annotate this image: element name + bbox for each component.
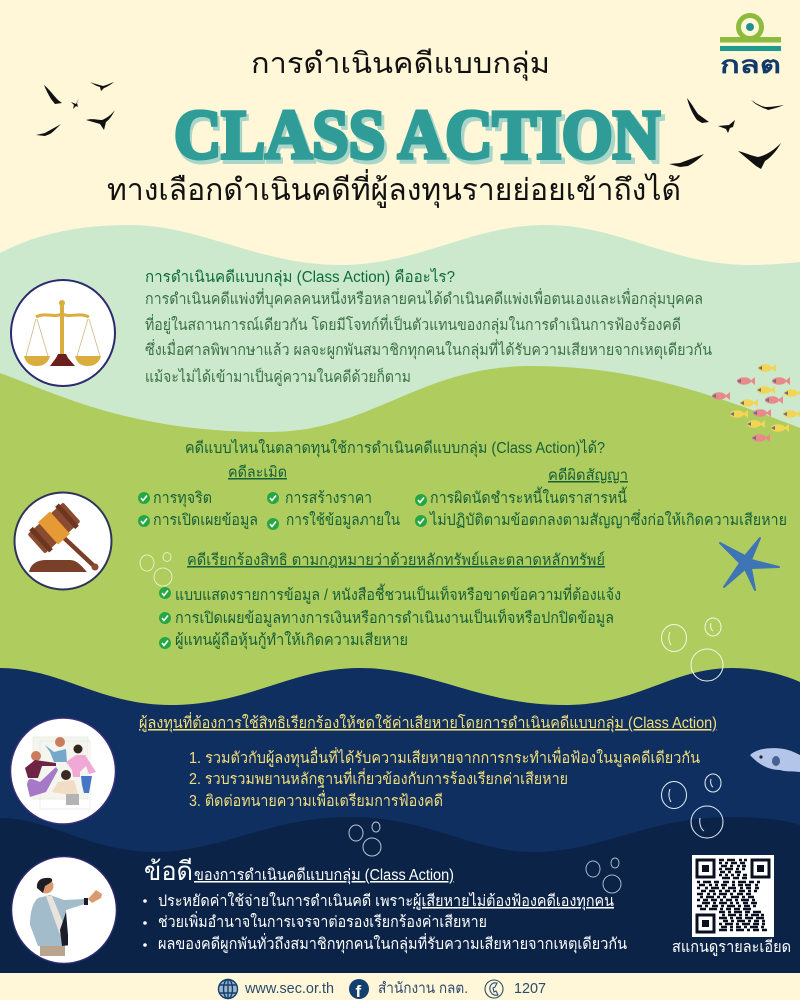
- heading: tort: คดีละเมิด: [228, 464, 287, 481]
- heading: breach of contract: คดีผิดสัญญา: [548, 467, 628, 484]
- panel: steps for investors: [10, 712, 717, 824]
- birds: right flock: [669, 98, 784, 169]
- text: definition: [145, 288, 712, 387]
- decoration: bubbles: [140, 552, 723, 893]
- icon: gavel: [14, 492, 112, 590]
- title: thai heading: การดำเนินคดีแบบกลุ่ม: [251, 48, 550, 81]
- heading: advantages: [144, 856, 454, 886]
- checklist: case types: การผิดนัดชำระหนี้ในตราสารหนี้: [430, 486, 627, 507]
- icon: starfish: [720, 538, 779, 590]
- text: website: www.sec.or.th: [244, 980, 334, 997]
- checklist: case types: การทุจริต: [153, 490, 212, 508]
- title: CLASS ACTION: CLASS ACTION: [174, 97, 660, 174]
- list: numbered steps: [189, 747, 700, 810]
- list: numbered steps: 2. รวบรวมพยานหลักฐานที่เกี่ยวข้องกับการร้องเรียกค่าเสียหาย: [189, 768, 568, 788]
- checklist: case types: [138, 486, 787, 530]
- text: hotline: 1207: [514, 980, 546, 997]
- QR code: [692, 855, 774, 937]
- heading: investor steps: ผู้ลงทุนที่ต้องการใช้สิทธิเรียกร้องให้ชดใช้ค่าเสียหายโดยการดำเนินคดีแบบกลุ่ม (Class Action): [139, 712, 717, 733]
- text: definition: แม้จะไม่ได้เข้ามาเป็นคู่ความในคดีด้วยก็ตาม: [145, 367, 411, 387]
- text: QR caption: สแกนดูรายละเอียด: [672, 939, 791, 957]
- icon: presenter: [12, 856, 116, 964]
- logo: SEC: [720, 16, 781, 79]
- icon: phone: [485, 980, 503, 998]
- checklist: securities claims: การเปิดเผยข้อมูลทางการเงินหรือการดำเนินงานเป็นเท็จหรือปกปิดข้อมูล: [175, 608, 614, 628]
- title: CLASS ACTION: CLASS ACTION: [176, 101, 664, 178]
- list: numbered steps: 3. ติดต่อทนายความเพื่อเตรียมการฟ้องคดี: [189, 790, 443, 810]
- checklist: case types: การใช้ข้อมูลภายใน: [286, 511, 400, 530]
- icon: blue fish: [750, 748, 800, 772]
- heading: what is it: การดำเนินคดีแบบกลุ่ม (Class Action) คืออะไร?: [145, 268, 455, 287]
- icon: globe: [218, 980, 238, 998]
- checklist: case types: การเปิดเผยข้อมูล: [153, 512, 258, 530]
- list: benefits: ผลของคดีผูกพันทั่วถึงสมาชิกทุกคนในกลุ่มที่รับความเสียหายจากเหตุเดียวกัน: [158, 933, 627, 954]
- footer: [218, 979, 546, 1000]
- heading: which cases: คดีแบบไหนในตลาดทุนใช้การดำเนินคดีแบบกลุ่ม (Class Action)ได้?: [185, 439, 605, 458]
- text: definition: การดำเนินคดีแพ่งที่บุคคลคนหนึ่งหรือหลายคนได้ดำเนินคดีแพ่งเพื่อตนเองและเพื่อกลุ่มบุคคล: [145, 288, 703, 309]
- subtitle: ทางเลือกดำเนินคดีที่ผู้ลงทุนรายย่อยเข้าถึงได้: [107, 169, 681, 209]
- text: facebook page: สำนักงาน กลต.: [378, 980, 468, 997]
- checklist: case types: การสร้างราคา: [285, 490, 372, 507]
- list: benefits: ช่วยเพิ่มอำนาจในการเจรจาต่อรองเรียกร้องค่าเสียหาย: [158, 911, 487, 931]
- decoration: school of fish: [712, 364, 800, 442]
- heading: securities law claims: คดีเรียกร้องสิทธิ ตามกฎหมายว่าด้วยหลักทรัพย์และตลาดหลักทรัพย์: [187, 551, 605, 569]
- list: benefits: ประหยัดค่าใช้จ่ายในการดำเนินคดี เพราะผู้เสียหายไม่ต้องฟ้องคดีเองทุกคน: [158, 892, 614, 911]
- checklist: securities claims: แบบแสดงรายการข้อมูล / หนังสือชี้ชวนเป็นเท็จหรือขาดข้อความที่ต้องแจ้ง: [175, 583, 621, 605]
- heading: advantages: ข้อดี: [144, 856, 193, 886]
- logo: SEC: กลต: [720, 52, 781, 79]
- list: benefits: [143, 892, 627, 954]
- text: definition: ที่อยู่ในสถานการณ์เดียวกัน โดยมีโจทก์ที่เป็นตัวแทนของกลุ่มในการดำเนินการฟ้องร้องคดี: [145, 314, 681, 335]
- icon: group of people: [10, 718, 116, 824]
- checklist: securities claims: ผู้แทนผู้ถือหุ้นกู้ทำให้เกิดความเสียหาย: [175, 631, 408, 650]
- checklist: securities claims: [159, 583, 621, 650]
- birds: left flock: [36, 82, 115, 136]
- text: definition: ซึ่งเมื่อศาลพิพากษาแล้ว ผลจะผูกพันสมาชิกทุกคนในกลุ่มที่ได้รับความเสียหายจากเหตุเดียวกัน: [145, 339, 712, 360]
- heading: advantages: ของการดำเนินคดีแบบกลุ่ม (Class Action): [194, 867, 454, 885]
- icon: scales of justice: [11, 280, 115, 386]
- panel: advantages: [12, 856, 627, 964]
- panel: what is class action: [11, 268, 712, 387]
- panel: eligible cases: [14, 439, 787, 650]
- list: numbered steps: 1. รวมตัวกับผู้ลงทุนอื่นที่ได้รับความเสียหายจากการกระทำเพื่อฟ้องในมูลคดีเดียวกัน: [189, 747, 700, 768]
- icon: facebook: [349, 979, 369, 1000]
